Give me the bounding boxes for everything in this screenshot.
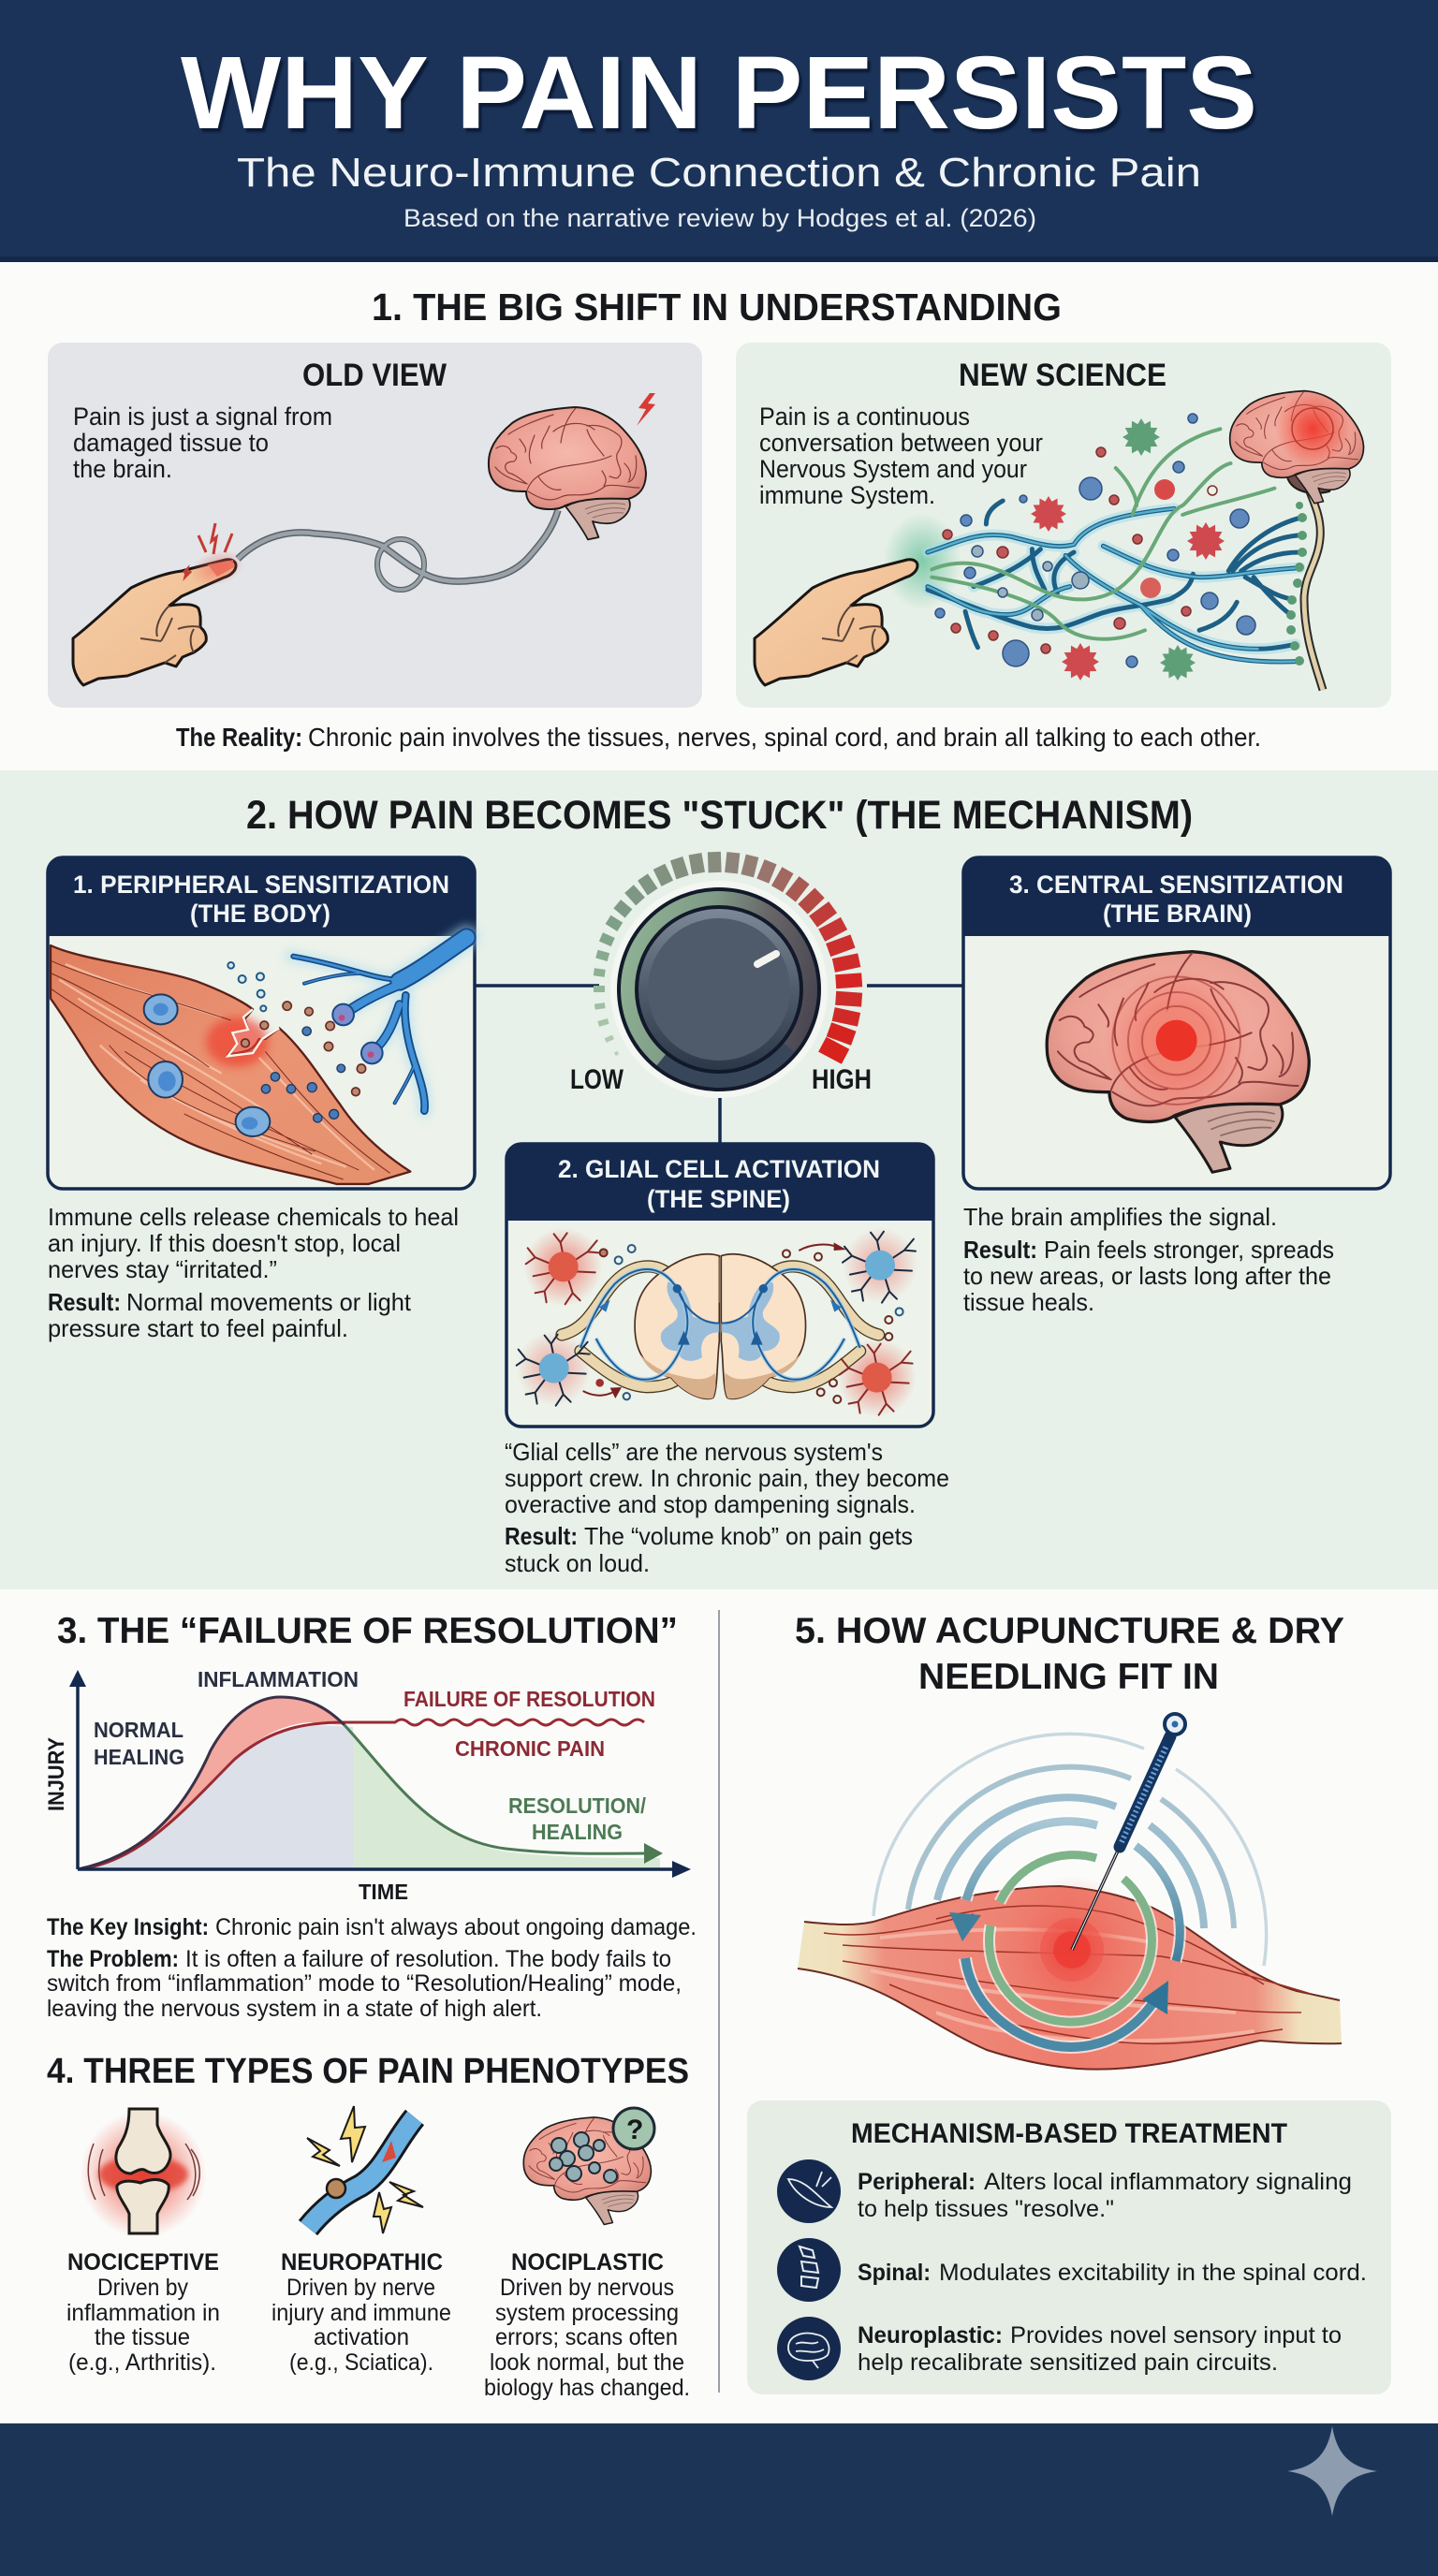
header text: 1. PERIPHERAL SENSITIZATION — [73, 871, 449, 899]
chart labels: NORMAL — [94, 1718, 183, 1742]
nociplastic text: biology has changed. — [484, 2375, 690, 2401]
neuropathic text: activation — [314, 2324, 409, 2350]
item: peripheral — [777, 2159, 1352, 2223]
reality statement: Chronic pain involves the tissues, nerves, spinal cord, and brain all talking to each other. — [308, 723, 1261, 752]
axis label: injury: INJURY — [44, 1737, 69, 1811]
muscle — [798, 1886, 1342, 2070]
circular arrows — [965, 1822, 1180, 2047]
icon: single wire signal — [238, 510, 558, 590]
text: central: The brain amplifies the signal. — [963, 1203, 1277, 1231]
key insight text: The Key Insight: — [47, 1914, 209, 1940]
chart labels: HEALING — [94, 1745, 184, 1769]
neuropathic text: Driven by nerve — [286, 2275, 435, 2301]
axis label: time: TIME — [359, 1880, 408, 1904]
icon: spinal cord — [1304, 477, 1323, 690]
icon: brain with question mark: ? — [626, 2115, 643, 2145]
icon: brain — [489, 407, 646, 539]
connector lines — [475, 986, 963, 1144]
peripheral text: Peripheral: — [858, 2169, 976, 2195]
illustration: brain with hot spot — [1047, 952, 1309, 1172]
section 3 heading: 3. THE “FAILURE OF RESOLUTION” — [57, 1611, 678, 1651]
text: peripheral: an injury. If this doesn't stop, local — [48, 1229, 401, 1257]
text: central — [963, 1203, 1334, 1316]
spinal text: Spinal: — [858, 2260, 931, 2286]
phenotype: nociceptive — [66, 2109, 220, 2376]
new science text: Pain is a continuous — [759, 402, 970, 431]
text: peripheral: Normal movements or light — [126, 1288, 412, 1316]
text: peripheral — [48, 1203, 459, 1342]
key insight text: The Problem: — [47, 1946, 179, 1972]
section 1: the big shift in understanding — [48, 285, 1391, 752]
phenotype: nociplastic — [484, 2108, 690, 2401]
low label: LOW — [570, 1064, 624, 1095]
text: central: tissue heals. — [963, 1288, 1094, 1316]
key insight text: switch from “inflammation” mode to “Resolution/Healing” mode, — [47, 1970, 682, 1997]
nociceptive text: Driven by — [97, 2275, 188, 2301]
text: central: to new areas, or lasts long after the — [963, 1262, 1331, 1290]
dial tick arc — [594, 852, 862, 1064]
panel: mechanism-based treatment — [747, 2100, 1391, 2394]
nociplastic text: look normal, but the — [490, 2349, 684, 2376]
icon: green glow at fingertip — [883, 513, 961, 610]
section 2 heading: 2. HOW PAIN BECOMES "STUCK" (THE MECHANISM) — [246, 793, 1193, 838]
nociplastic text — [484, 2249, 690, 2401]
illustration: spinal cord cross-section — [517, 1228, 917, 1416]
panel: new science — [736, 343, 1391, 708]
knob pointer — [757, 954, 776, 964]
section 4 heading: 4. THREE TYPES OF PAIN PHENOTYPES — [47, 2052, 689, 2091]
icon: muscle — [777, 2159, 841, 2223]
text: glial: “Glial cells” are the nervous system's — [505, 1438, 883, 1466]
title: WHY PAIN PERSISTS — [181, 36, 1257, 151]
text: glial: The “volume knob” on pain gets — [584, 1522, 913, 1550]
chart labels: RESOLUTION/ — [508, 1793, 647, 1818]
nociceptive text: NOCICEPTIVE — [67, 2249, 219, 2276]
header text: (THE BODY) — [190, 900, 330, 928]
chart labels: HEALING — [532, 1820, 623, 1844]
old view heading: OLD VIEW — [302, 358, 448, 393]
text: peripheral: Result: — [48, 1288, 121, 1316]
icon: hand with injured finger — [73, 523, 249, 685]
panel: central sensitization — [963, 857, 1390, 1189]
new science text — [759, 402, 1043, 509]
line chart — [44, 1667, 691, 1904]
nociceptive text — [66, 2249, 220, 2376]
needle — [1072, 1714, 1185, 1950]
target hot spot — [997, 1875, 1147, 2025]
header text — [73, 871, 449, 928]
new science text: Nervous System and your — [759, 455, 1027, 483]
chart labels: CHRONIC PAIN — [455, 1736, 605, 1761]
nociplastic text: system processing — [495, 2300, 679, 2326]
key insight text — [47, 1914, 697, 2022]
header text: 2. GLIAL CELL ACTIVATION — [558, 1155, 880, 1183]
section 5: acupuncture and dry needling — [747, 1611, 1391, 2394]
spinal text: Modulates excitability in the spinal cord. — [939, 2260, 1367, 2286]
neuroplastic text: Neuroplastic: — [858, 2322, 1003, 2349]
chart labels: INFLAMMATION — [198, 1667, 359, 1691]
text: glial — [505, 1438, 949, 1577]
icon: sparkle star — [1287, 2426, 1377, 2516]
section 5 heading: NEEDLING FIT IN — [918, 1657, 1219, 1697]
peripheral text: Alters local inflammatory signaling — [984, 2169, 1352, 2195]
neuropathic text: (e.g., Sciatica). — [289, 2349, 433, 2376]
subtitle: The Neuro-Immune Connection & Chronic Pain — [237, 150, 1201, 196]
header text: 3. CENTRAL SENSITIZATION — [1009, 871, 1343, 899]
icon: nerve network — [928, 429, 1301, 662]
high label: HIGH — [812, 1064, 872, 1095]
old view text: the brain. — [73, 455, 172, 483]
section 1 heading: 1. THE BIG SHIFT IN UNDERSTANDING — [372, 285, 1062, 329]
icon: damaged nerve with bolts — [307, 2106, 423, 2233]
icon: brain outline — [777, 2317, 841, 2380]
nociplastic text: errors; scans often — [495, 2324, 678, 2350]
illustration: needle in muscle with ripples — [798, 1714, 1342, 2070]
header text — [1009, 871, 1343, 928]
item: neuroplastic — [777, 2317, 1342, 2380]
icon: vertebrae — [777, 2238, 841, 2302]
section 2: how pain becomes stuck — [0, 770, 1438, 1589]
nociceptive text: the tissue — [95, 2324, 190, 2350]
text: glial: support crew. In chronic pain, they become — [505, 1464, 949, 1492]
text: peripheral: pressure start to feel painful. — [48, 1314, 348, 1342]
old view text: Pain is just a signal from — [73, 402, 332, 431]
chart labels — [94, 1667, 655, 1844]
neuropathic text — [271, 2249, 451, 2376]
header text: (THE SPINE) — [647, 1185, 790, 1213]
nociceptive text: inflammation in — [66, 2300, 220, 2326]
neuroplastic text — [858, 2322, 1342, 2376]
new science text: conversation between your — [759, 429, 1043, 457]
icon: inflamed joint — [80, 2109, 207, 2238]
divider between columns — [718, 1610, 720, 2393]
citation: Based on the narrative review by Hodges et al. (2026) — [404, 204, 1036, 232]
icon: hand — [755, 560, 917, 685]
new science heading: NEW SCIENCE — [959, 358, 1167, 393]
old view text — [73, 402, 332, 483]
icon: nerve endings — [1286, 502, 1307, 666]
knob body — [610, 881, 828, 1098]
text: peripheral: Immune cells release chemicals to heal — [48, 1203, 459, 1231]
header text — [558, 1155, 880, 1213]
item: spinal — [777, 2238, 1367, 2302]
icon: brain with hot spot — [1230, 391, 1364, 504]
section 4: three types of pain phenotypes — [47, 2052, 690, 2401]
key insight text: Chronic pain isn't always about ongoing damage. — [215, 1914, 697, 1940]
peripheral text — [858, 2169, 1352, 2222]
header text: (THE BRAIN) — [1103, 900, 1252, 928]
text: central: Pain feels stronger, spreads — [1044, 1236, 1334, 1264]
key insight text: leaving the nervous system in a state of high alert. — [47, 1996, 542, 2022]
nociplastic text: NOCIPLASTIC — [511, 2249, 664, 2276]
panel: old view — [48, 343, 702, 708]
illustration: injured muscle and nerve — [51, 938, 466, 1184]
neuropathic text: NEUROPATHIC — [281, 2249, 443, 2276]
nociplastic text: Driven by nervous — [500, 2275, 674, 2301]
new science text: immune System. — [759, 481, 935, 509]
icon: brain with question mark — [523, 2108, 654, 2224]
nociceptive text: (e.g., Arthritis). — [68, 2349, 216, 2376]
text: glial: Result: — [505, 1522, 578, 1550]
icon: red bolt — [637, 393, 655, 426]
old view text: damaged tissue to — [73, 429, 269, 457]
treatment heading: MECHANISM-BASED TREATMENT — [851, 2118, 1287, 2149]
icon: immune cells — [935, 414, 1255, 681]
footer band — [0, 2423, 1438, 2576]
phenotype: neuropathic — [271, 2106, 451, 2376]
text: peripheral: nerves stay “irritated.” — [48, 1255, 277, 1283]
section 5 heading: 5. HOW ACUPUNCTURE & DRY — [795, 1611, 1344, 1651]
peripheral text: to help tissues "resolve." — [858, 2196, 1114, 2222]
panel: peripheral sensitization — [48, 857, 475, 1189]
reality statement: The Reality: — [176, 723, 302, 752]
section 5 heading — [795, 1611, 1344, 1697]
text: glial: overactive and stop dampening signals. — [505, 1490, 916, 1518]
section 3: failure of resolution — [44, 1611, 697, 2022]
volume knob dial — [570, 852, 872, 1098]
chart labels: FAILURE OF RESOLUTION — [404, 1687, 655, 1711]
panel: glial cell activation — [506, 1144, 933, 1427]
neuroplastic text: Provides novel sensory input to — [1010, 2322, 1342, 2349]
key insight text: It is often a failure of resolution. The body fails to — [185, 1946, 671, 1972]
header band — [0, 0, 1438, 262]
text: central: Result: — [963, 1236, 1037, 1264]
text: glial: stuck on loud. — [505, 1549, 650, 1577]
neuroplastic text: help recalibrate sensitized pain circuits. — [858, 2349, 1278, 2376]
neuropathic text: injury and immune — [271, 2300, 451, 2326]
